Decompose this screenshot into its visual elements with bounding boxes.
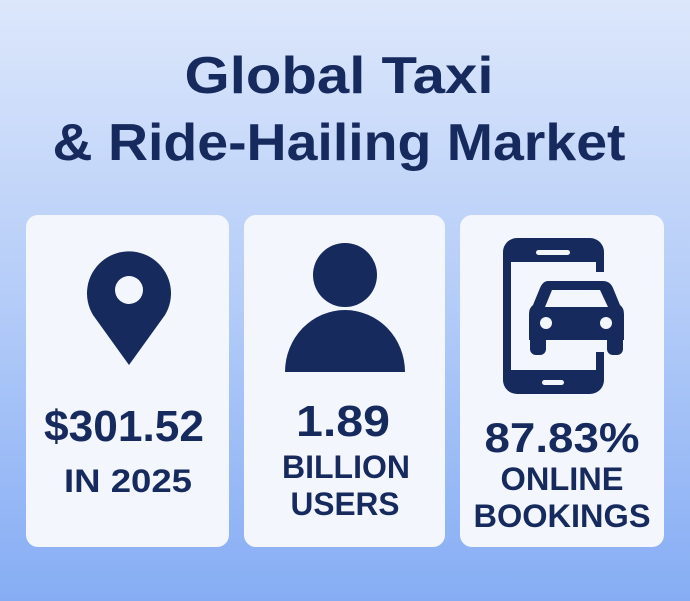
bookings text — [474, 414, 650, 534]
panel: users — [244, 215, 445, 547]
title — [52, 47, 626, 172]
users text — [282, 397, 410, 522]
icon: person — [285, 243, 405, 372]
title: Global Taxi — [184, 47, 494, 105]
panel: online bookings — [460, 215, 664, 547]
title: & Ride-Hailing Market — [52, 114, 626, 172]
panel: market value — [26, 215, 229, 547]
bookings text: BOOKINGS — [474, 498, 650, 534]
value text: $301.52 — [44, 402, 204, 451]
users text: USERS — [290, 486, 400, 522]
bookings text: 87.83% — [484, 414, 640, 461]
icon: phone with car — [503, 238, 624, 394]
icon: location pin — [87, 251, 171, 365]
value text — [44, 402, 204, 499]
users text: 1.89 — [296, 397, 390, 446]
users text: BILLION — [282, 449, 410, 485]
bookings text: ONLINE — [500, 461, 624, 497]
value text: IN 2025 — [64, 463, 192, 499]
